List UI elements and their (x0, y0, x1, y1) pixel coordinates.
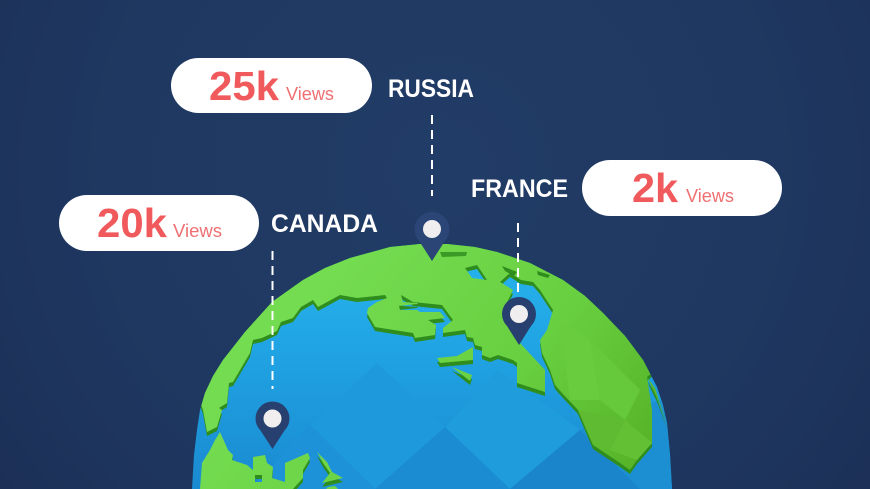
pill: Canada views: Views (173, 221, 222, 241)
dashed connector: Russia (431, 115, 433, 196)
pill: Russia views (171, 58, 372, 113)
map pin: Russia (415, 212, 450, 261)
label: France: FRANCE (471, 175, 568, 203)
map pin: Canada (255, 401, 290, 449)
pill: France views (582, 160, 782, 216)
land extrusion (200, 244, 667, 489)
callout: France (471, 160, 782, 345)
pill: Canada views: 20k (97, 200, 167, 246)
dashed connector: France (517, 223, 519, 297)
pill: Russia views: 25k (209, 63, 279, 109)
ocean (180, 240, 690, 489)
pill: France views: 2k (632, 165, 678, 211)
callout: Russia (171, 58, 474, 261)
land facets (440, 252, 652, 460)
pill: Canada views (59, 195, 259, 251)
globe (192, 244, 672, 489)
pill: Russia views: Views (286, 84, 334, 104)
callout: Canada (59, 195, 378, 449)
pill: France views: Views (686, 186, 734, 206)
map pin: France (502, 297, 536, 345)
continents (200, 244, 667, 489)
land surface (200, 244, 667, 489)
label: Russia: RUSSIA (388, 75, 474, 103)
dashed connector: Canada (272, 251, 274, 389)
label: Canada: CANADA (271, 210, 378, 238)
